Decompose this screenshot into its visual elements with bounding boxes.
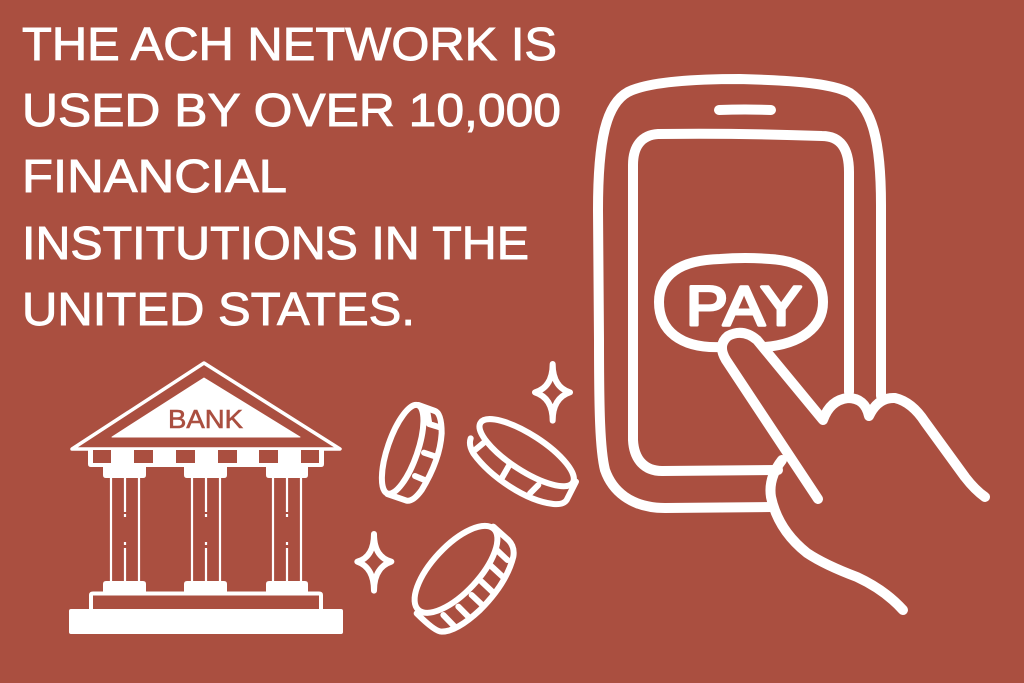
heading text: USED BY OVER 10,000	[22, 84, 561, 136]
icon: phone with pay button and hand	[598, 79, 985, 610]
bank pediment with label	[112, 378, 300, 437]
phone screen	[633, 134, 849, 471]
heading text: FINANCIAL	[22, 150, 287, 202]
heading text: INSTITUTIONS IN THE	[22, 217, 529, 269]
hand	[722, 333, 985, 499]
heading text: THE ACH NETWORK IS	[22, 18, 557, 70]
bank roof	[72, 363, 340, 449]
coin top right	[470, 408, 583, 504]
pay button	[659, 258, 823, 347]
heading text: UNITED STATES.	[22, 283, 415, 335]
coin bottom	[401, 513, 514, 632]
heading text	[22, 18, 561, 335]
phone speaker	[719, 104, 771, 115]
bank base	[69, 609, 343, 634]
hand lower edge	[770, 460, 903, 610]
coin top left	[373, 400, 442, 501]
sparkle bottom	[357, 534, 391, 591]
bank entablature	[88, 449, 324, 467]
bank columns	[103, 466, 308, 593]
icon: bank building	[69, 363, 343, 634]
phone outer body	[598, 79, 881, 508]
sparkle top	[535, 364, 570, 421]
icon: coins and sparkles	[357, 364, 583, 632]
bank plinth	[91, 594, 321, 609]
pay button: PAY	[686, 274, 802, 337]
bank pediment with label: BANK	[168, 404, 244, 434]
